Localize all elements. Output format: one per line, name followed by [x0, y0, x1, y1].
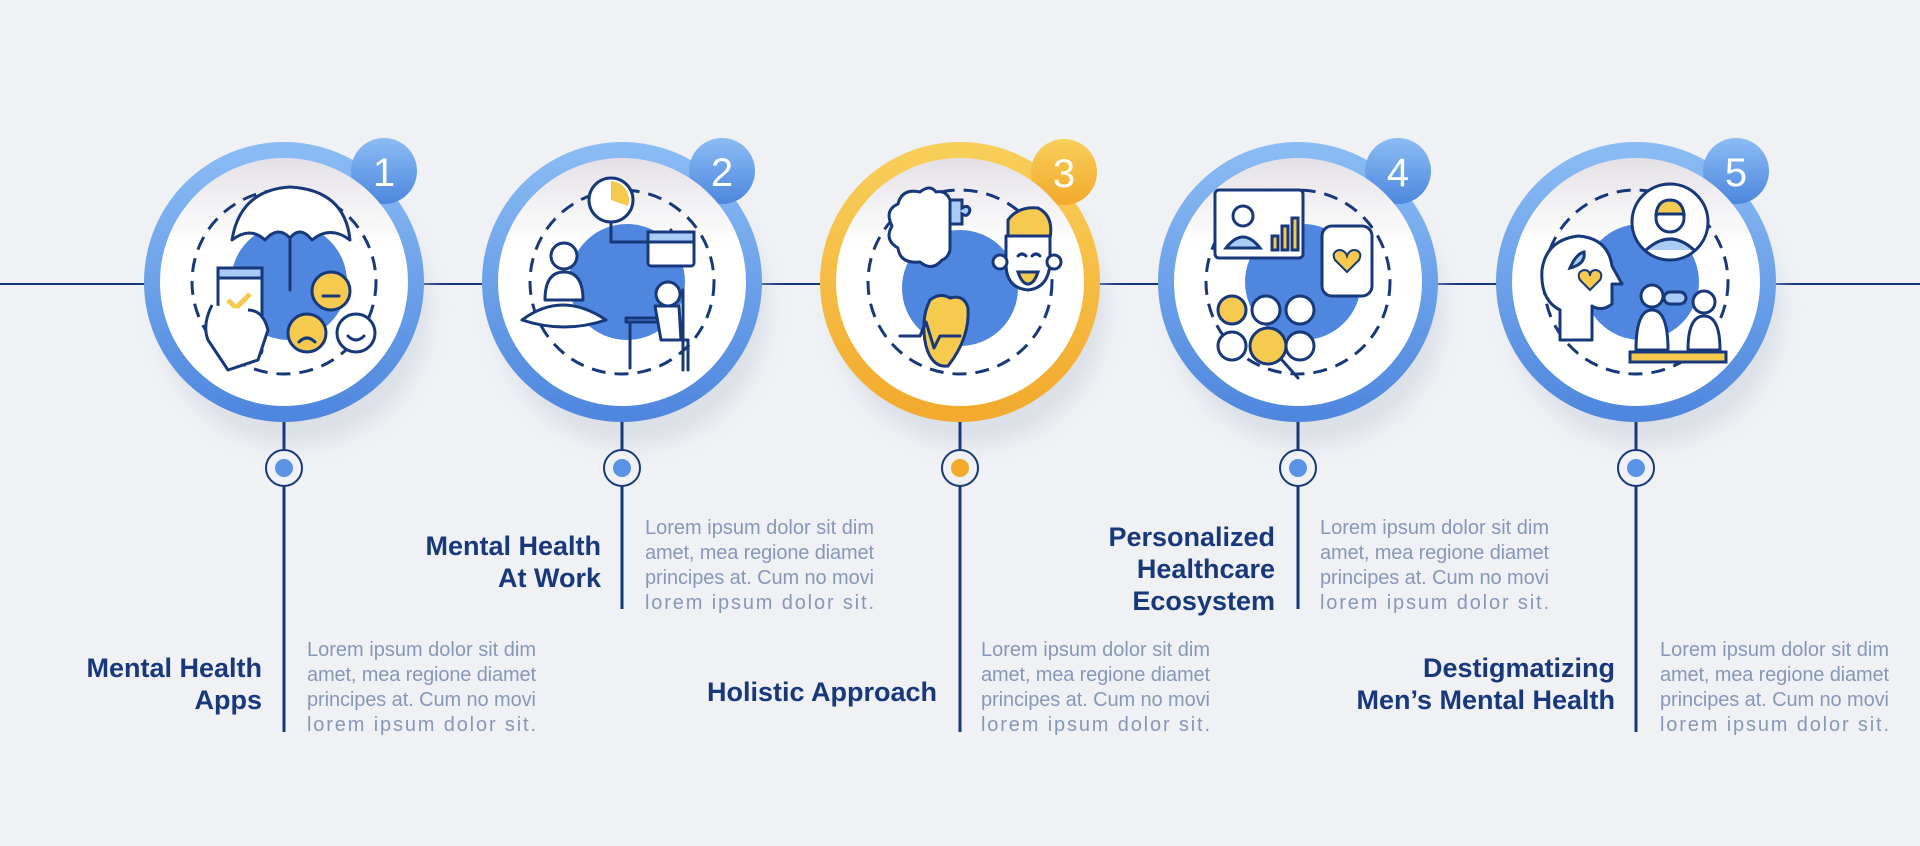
icon: phone umbrella emotions: [192, 187, 376, 374]
badge 2: [689, 138, 755, 204]
body 4: Lorem ipsum dolor sit dim: [1320, 517, 1549, 539]
title 5: Destigmatizing: [1423, 653, 1615, 683]
title 3: Holistic Approach: [707, 677, 937, 707]
body 3: principes at. Cum no movi: [981, 689, 1210, 711]
badge 2: 2: [711, 151, 733, 195]
body 4: lorem ipsum dolor sit.: [1320, 592, 1549, 614]
body 5: Lorem ipsum dolor sit dim: [1660, 639, 1889, 661]
title 4: Ecosystem: [1132, 586, 1275, 616]
icon: work balance: [522, 178, 714, 374]
badge 4: 4: [1387, 151, 1409, 195]
body 3: amet, mea regione diamet: [981, 664, 1210, 686]
badge 4: [1365, 138, 1431, 204]
badge 5: 5: [1725, 151, 1747, 195]
body 2: lorem ipsum dolor sit.: [645, 592, 874, 614]
body 2: amet, mea regione diamet: [645, 542, 874, 564]
body 1: lorem ipsum dolor sit.: [307, 714, 536, 736]
body 1: principes at. Cum no movi: [307, 689, 536, 711]
step 5: Destigmatizing Men's Mental Health: [1496, 138, 1781, 732]
body 3: Lorem ipsum dolor sit dim: [981, 639, 1210, 661]
title 1: Apps: [194, 685, 262, 715]
title 2: At Work: [498, 563, 602, 593]
body 1: amet, mea regione diamet: [307, 664, 536, 686]
badge 5: [1703, 138, 1769, 204]
step 4: Personalized Healthcare Ecosystem: [1158, 138, 1443, 609]
body 5: principes at. Cum no movi: [1660, 689, 1889, 711]
title 5: Men’s Mental Health: [1356, 685, 1615, 715]
icon: men mental health: [1542, 184, 1728, 374]
badge 1: 1: [373, 151, 395, 195]
body 4: principes at. Cum no movi: [1320, 567, 1549, 589]
timeline line: [0, 283, 1920, 285]
body 2: Lorem ipsum dolor sit dim: [645, 517, 874, 539]
icon: brain heart face: [868, 188, 1061, 374]
body 3: lorem ipsum dolor sit.: [981, 714, 1210, 736]
body 5: amet, mea regione diamet: [1660, 664, 1889, 686]
badge 3: [1031, 139, 1097, 205]
step 1: Mental Health Apps: [144, 138, 429, 732]
title 2: Mental Health: [425, 531, 601, 561]
body 5: lorem ipsum dolor sit.: [1660, 714, 1889, 736]
title 4: Healthcare: [1137, 554, 1275, 584]
step 3: Holistic Approach: [820, 139, 1105, 732]
icon: telehealth smartwatch emotions: [1206, 190, 1390, 378]
title 1: Mental Health: [86, 653, 262, 683]
title 4: Personalized: [1108, 522, 1275, 552]
badge 1: [351, 138, 417, 204]
body 4: amet, mea regione diamet: [1320, 542, 1549, 564]
body 1: Lorem ipsum dolor sit dim: [307, 639, 536, 661]
badge 3: 3: [1053, 152, 1075, 196]
step 2: Mental Health At Work: [482, 138, 767, 609]
body 2: principes at. Cum no movi: [645, 567, 874, 589]
